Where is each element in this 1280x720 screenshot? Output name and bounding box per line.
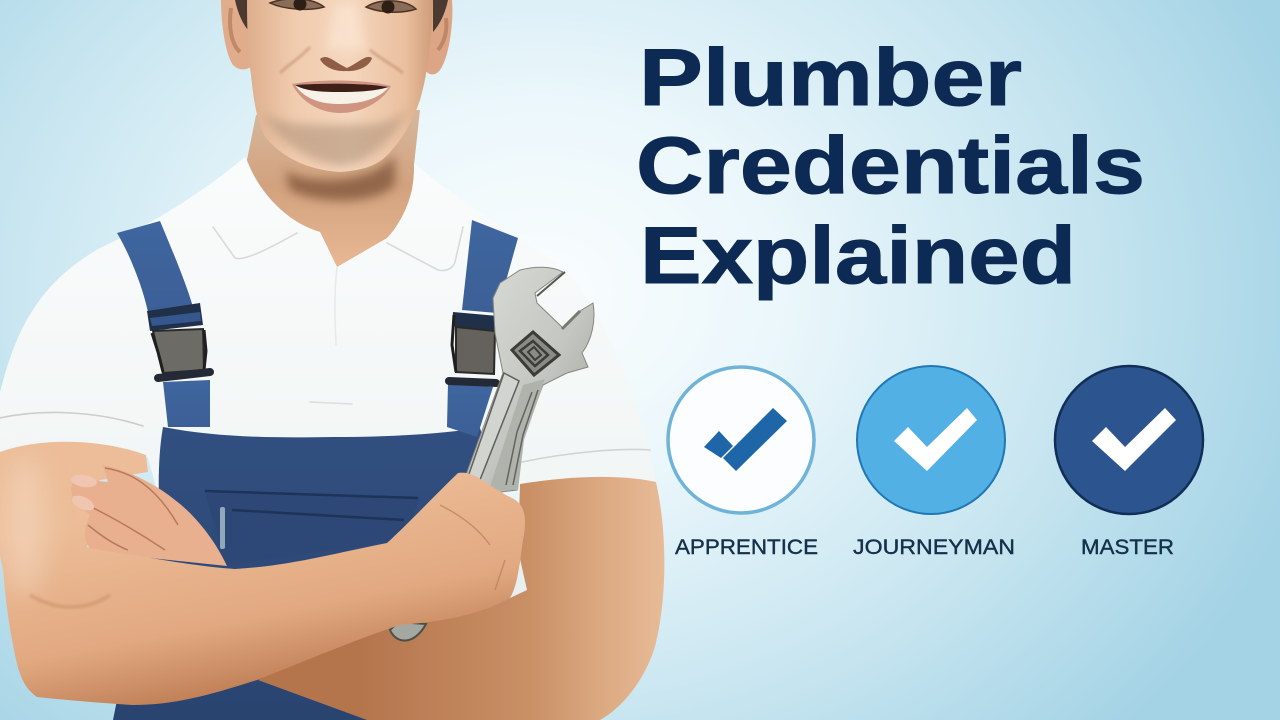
eyes (270, 0, 416, 14)
denim bib (113, 427, 520, 720)
left strap and buckle (117, 221, 210, 427)
neck (247, 110, 420, 267)
wrench end below hand (390, 622, 426, 641)
nose (320, 5, 372, 71)
crossed arm, forearm and gripping hand (0, 442, 525, 705)
bib pocket and zipper (205, 491, 420, 565)
label: master: MASTER (1081, 536, 1174, 559)
adjustable wrench (458, 267, 594, 497)
folded fingers (70, 465, 227, 566)
plumber figure (0, 0, 664, 720)
title (636, 33, 1145, 301)
right upper arm and lower forearm (258, 477, 664, 720)
label: apprentice: APPRENTICE (675, 536, 818, 559)
right strap and buckle (447, 220, 518, 437)
shirt sliver behind hand (510, 552, 527, 598)
ears and hair (221, 0, 452, 74)
hand knuckle lines (440, 505, 505, 590)
face (247, 0, 433, 172)
badge: apprentice (668, 367, 818, 559)
elbow crease (30, 595, 110, 607)
under-chin shadow (285, 155, 395, 201)
smile (280, 47, 403, 113)
white polo shirt (0, 157, 656, 520)
arm highlight (3, 455, 47, 595)
title: Credentials (636, 121, 1145, 211)
badge: master (1055, 366, 1203, 559)
label: journeyman: JOURNEYMAN (853, 536, 1015, 559)
stubble shadow (262, 105, 412, 166)
shirt collar and placket (0, 227, 650, 462)
title: Explained (640, 211, 1076, 301)
title: Plumber (639, 33, 1022, 123)
badge: journeyman (853, 366, 1015, 559)
